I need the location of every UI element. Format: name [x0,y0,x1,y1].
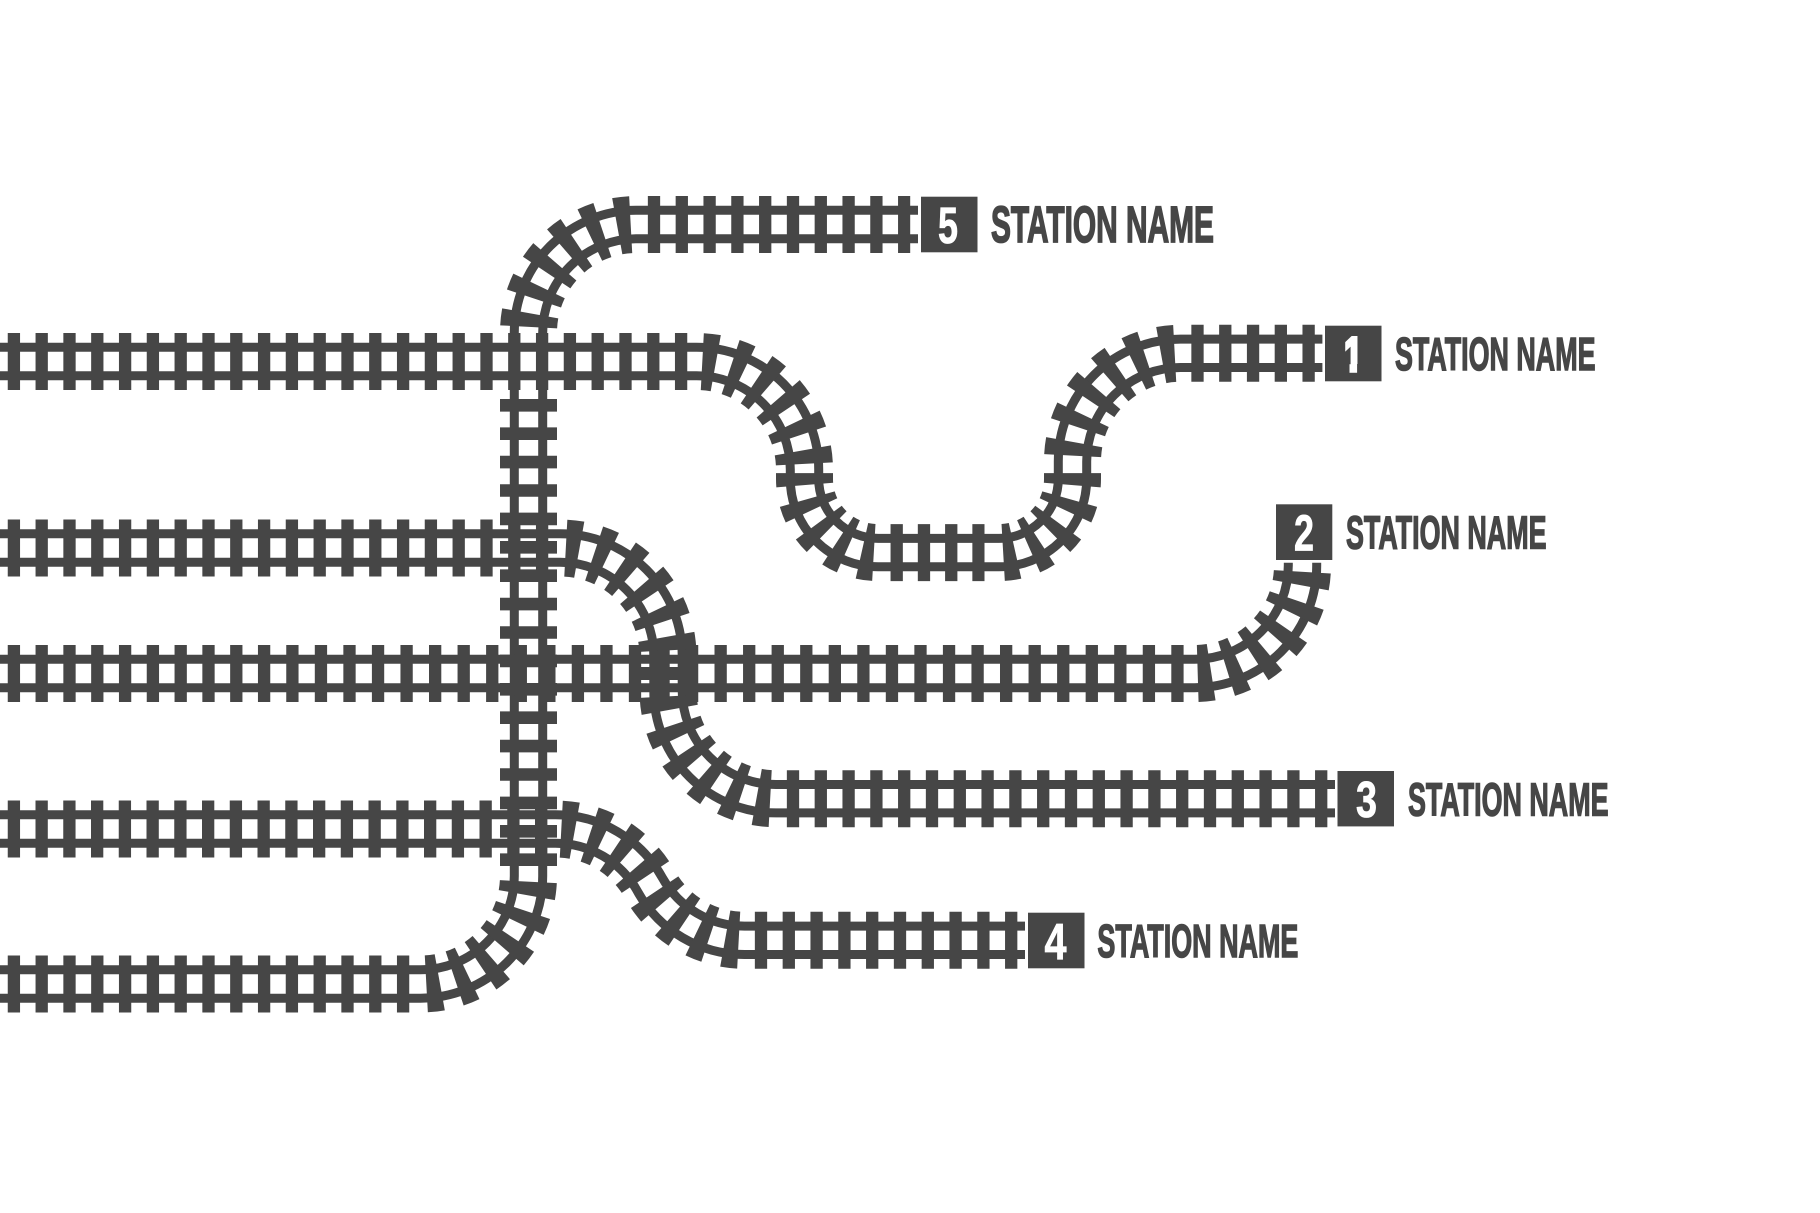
track 5: bottom-left line, vertical trunk, curve to station 5 [0,210,918,998]
station 3: number badge and name [1338,771,1608,828]
station 5: number badge and name [921,196,1214,254]
station 1: number badge and name [1325,326,1596,382]
track 4: S-bend line to station 4 [0,815,1025,954]
station 3: number badge and name: 3 [1356,771,1377,828]
station 4: number badge and name: STATION NAME [1097,915,1298,967]
station 4: number badge and name [1028,913,1298,970]
track 1: S-curve line to station 1 [0,339,1322,567]
station 4: number badge and name: 4 [1044,913,1067,970]
station 5: number badge and name: STATION NAME [991,196,1214,253]
station 1: number badge and name: 1 [1344,329,1362,382]
station 5: number badge and name: 5 [938,197,958,254]
track 3: line curving down to station 3 [0,534,1335,813]
track 2: long straight line rising to station 2 [0,563,1317,688]
station 2: number badge and name: STATION NAME [1346,507,1546,559]
station 3: number badge and name: STATION NAME [1408,773,1608,825]
station 2: number badge and name: 2 [1294,504,1314,562]
station 2: number badge and name [1276,504,1546,562]
station 1: number badge and name: STATION NAME [1395,328,1596,380]
